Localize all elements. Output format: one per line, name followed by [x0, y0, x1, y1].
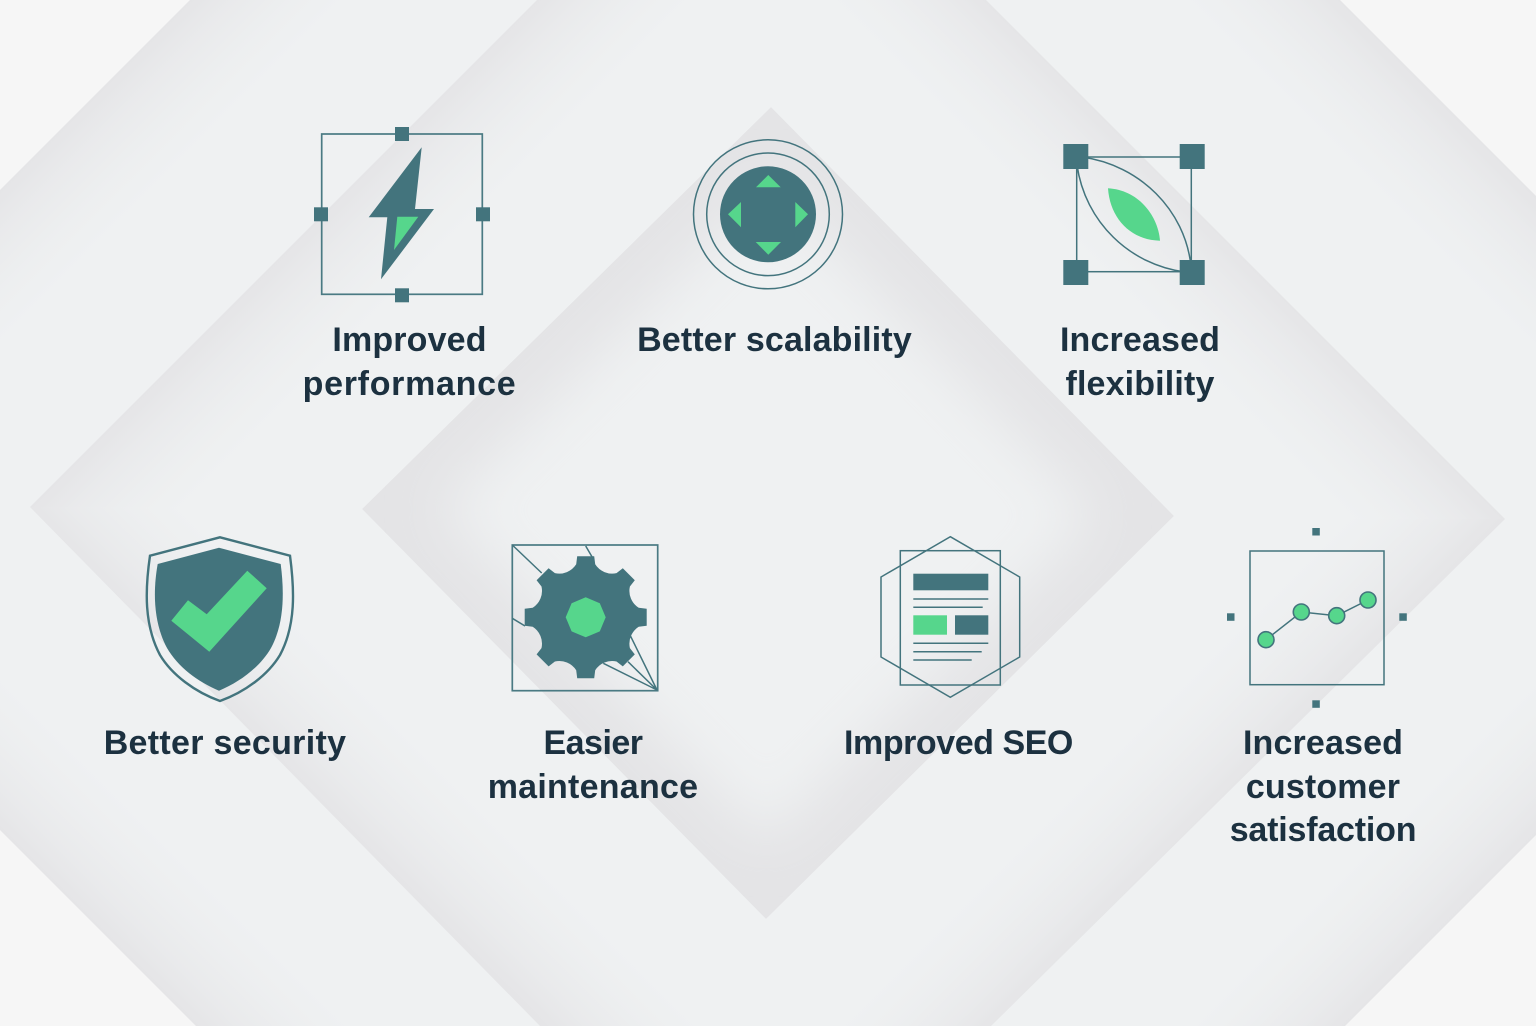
label: improved performance: Improved: [332, 321, 487, 359]
label: easier maintenance: Easier: [543, 724, 643, 762]
label: better security: Better security: [104, 724, 346, 762]
label: increased customer satisfaction: customer: [1246, 768, 1400, 806]
panel: easier maintenance: [488, 545, 698, 806]
label: improved SEO: Improved SEO: [844, 724, 1073, 762]
label: increased flexibility: flexibility: [1065, 365, 1215, 403]
panel: better security: [104, 537, 346, 762]
icon: gear in frame: [512, 545, 658, 691]
panel: improved SEO: [844, 537, 1073, 762]
label: better scalability: Better scalability: [637, 321, 912, 359]
icon: line chart in frame: [1227, 528, 1407, 708]
label: increased flexibility: Increased: [1060, 321, 1220, 359]
icon: lightning bolt in frame: [314, 127, 490, 302]
icon: leaf in bezier frame: [1063, 144, 1205, 285]
panel: improved performance: [303, 127, 516, 403]
label: increased customer satisfaction: Increased: [1243, 724, 1403, 762]
icon: document in hexagon: [881, 537, 1020, 697]
label: increased customer satisfaction: satisfaction: [1230, 811, 1416, 849]
panel: increased customer satisfaction: [1227, 528, 1416, 849]
label: easier maintenance: maintenance: [488, 768, 698, 806]
panel: better scalability: [637, 140, 912, 359]
label: improved performance: performance: [303, 365, 516, 403]
icon: shield with check mark: [147, 537, 293, 701]
icon: concentric circles with arrows: [694, 140, 842, 289]
panel: increased flexibility: [1060, 144, 1220, 403]
